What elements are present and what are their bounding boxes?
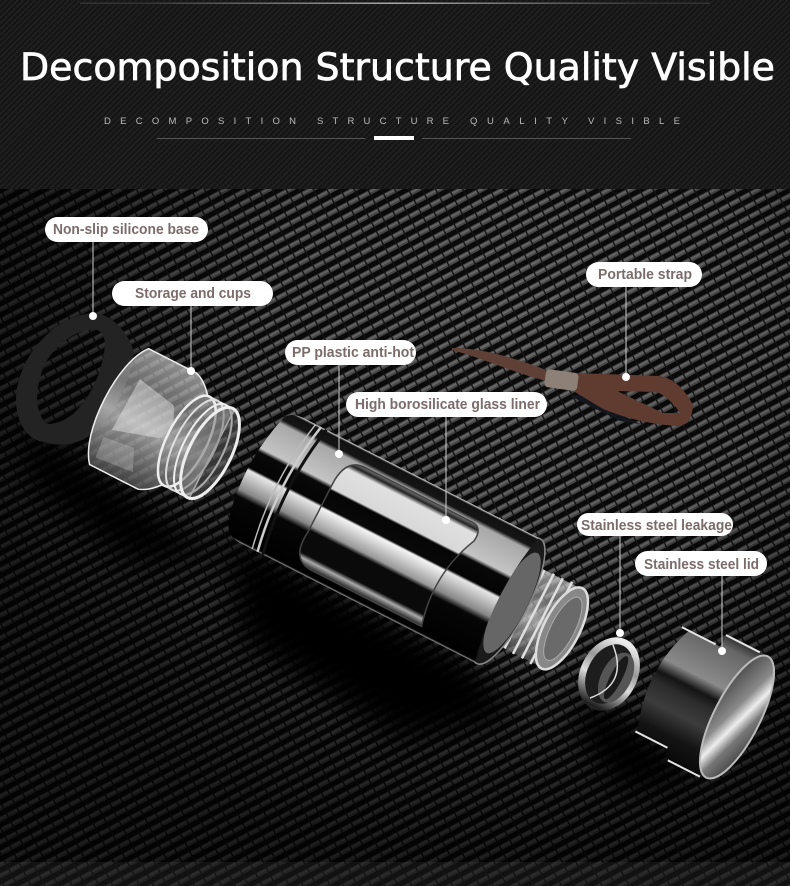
label: pp plastic anti-hot — [285, 340, 416, 458]
silicone base ring — [16, 313, 134, 445]
subtitle — [104, 116, 680, 127]
header band — [0, 0, 790, 189]
label: portable strap: Portable strap — [598, 266, 692, 283]
label: non-slip silicone base — [45, 217, 208, 320]
shoulder collar — [459, 530, 558, 673]
glass storage cup — [75, 341, 258, 520]
subtitle: STRUCTURE — [317, 116, 449, 127]
bottle body — [216, 406, 610, 699]
label: non-slip silicone base: Non-slip silicone base — [53, 221, 199, 238]
subtitle: VISIBLE — [588, 116, 680, 127]
portable strap — [452, 348, 693, 426]
label: portable strap — [586, 262, 702, 381]
label: stainless steel lid — [635, 551, 767, 655]
stainless steel leakage ring — [567, 627, 651, 721]
label: high borosilicate glass liner — [346, 392, 547, 524]
viewing window — [293, 457, 482, 630]
label: storage and cups: Storage and cups — [135, 285, 251, 302]
shadows — [20, 420, 700, 790]
subtitle: QUALITY — [470, 116, 569, 127]
label: high borosilicate glass liner: High borosilicate glass liner — [355, 396, 540, 413]
title: Decomposition Structure Quality Visible — [20, 46, 775, 89]
label: storage and cups — [112, 281, 273, 375]
carbon fibre background — [0, 189, 790, 886]
label: pp plastic anti-hot: PP plastic anti-hot — [292, 344, 414, 361]
glass neck — [489, 561, 599, 678]
subtitle: DECOMPOSITION — [104, 116, 296, 127]
label: stainless steel leakage: Stainless steel leakage — [581, 517, 732, 534]
label: stainless steel leakage — [577, 513, 733, 637]
title divider — [157, 136, 631, 140]
stainless steel lid — [622, 613, 789, 791]
label: stainless steel lid: Stainless steel lid — [644, 556, 759, 573]
